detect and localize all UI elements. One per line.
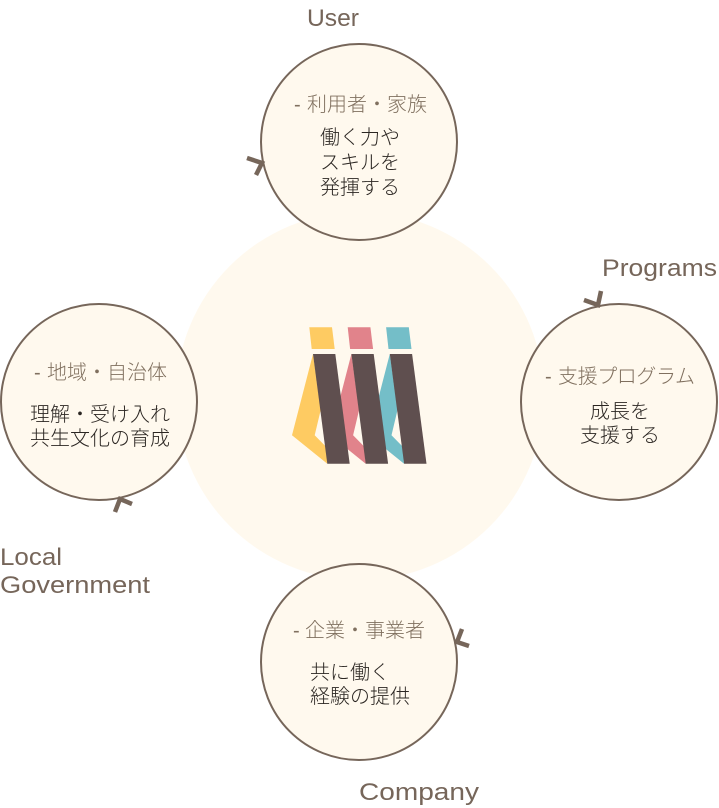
programs description: 成長を — [590, 400, 650, 423]
arrow: company — [457, 629, 469, 646]
label: local government: Government — [0, 572, 150, 599]
company description: 共に働く — [310, 661, 390, 684]
panel: programs — [521, 304, 717, 500]
local government description: 共生文化の育成 — [30, 427, 170, 450]
company heading: 企業・事業者 — [305, 619, 425, 642]
user description: 発揮する — [320, 176, 400, 199]
label: company: Company — [359, 779, 479, 806]
panel: user — [261, 44, 457, 240]
label: programs: Programs — [602, 255, 717, 282]
company heading: - — [293, 620, 300, 642]
programs description: 支援する — [580, 424, 660, 447]
company description: 経験の提供 — [310, 685, 410, 708]
user heading: - — [294, 94, 301, 116]
label: user: User — [307, 5, 359, 32]
panel: company — [261, 564, 457, 760]
local government heading: - — [34, 362, 41, 384]
programs heading: 支援プログラム — [558, 365, 695, 388]
central background circle — [176, 212, 544, 580]
label: local government: Local — [0, 544, 62, 571]
user heading: 利用者・家族 — [307, 93, 427, 116]
user description: スキルを — [320, 152, 400, 174]
arrow: programs — [584, 291, 601, 305]
arrow: user — [247, 158, 262, 175]
local government heading: 地域・自治体 — [47, 361, 167, 384]
user description: 働く力や — [320, 126, 400, 149]
local government description: 理解・受け入れ — [30, 403, 170, 426]
arrow: local government — [115, 499, 132, 512]
programs heading: - — [545, 366, 552, 388]
panel: local government — [1, 304, 197, 500]
logo — [292, 327, 426, 464]
